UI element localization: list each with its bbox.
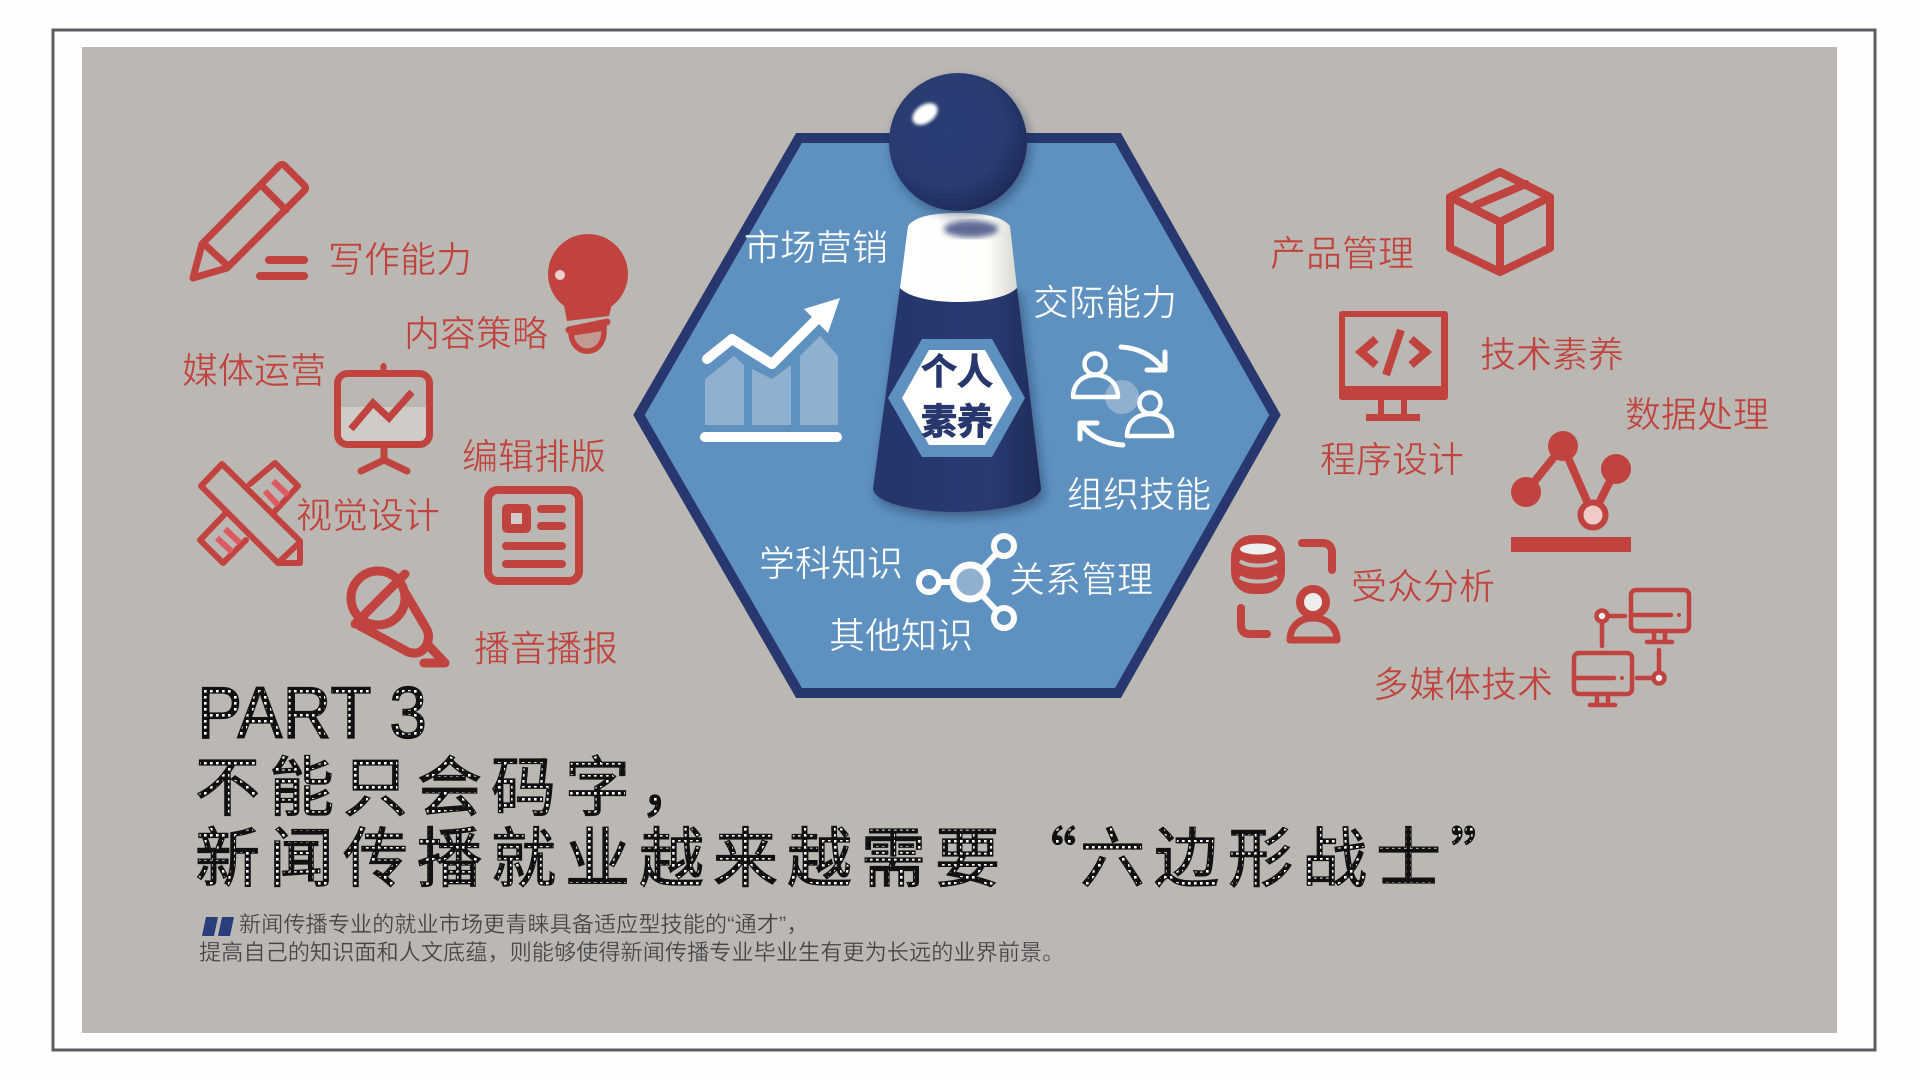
icon: people exchange <box>1073 347 1172 445</box>
icon: data processing <box>1511 431 1631 552</box>
label: 内容策略: 内容策略 <box>404 313 548 354</box>
central hexagon <box>639 138 1275 693</box>
label: 市场营销: 市场营销 <box>744 227 888 268</box>
title line 2: 新闻传播就业越来越需要“六边形战士” <box>195 806 1515 900</box>
label: 程序设计: 程序设计 <box>1320 439 1464 480</box>
label: 受众分析: 受众分析 <box>1351 566 1495 607</box>
badge text: 个人 <box>921 343 993 395</box>
pawn white collar <box>900 213 1017 302</box>
icon: code monitor <box>1339 311 1448 421</box>
title: PART 3: PART 3 <box>197 673 427 754</box>
body text line 1: 新闻传播专业的就业市场更青睐具备适应型技能的“通才”， <box>239 912 808 937</box>
pawn figure <box>873 73 1041 512</box>
label: 学科知识: 学科知识 <box>759 543 903 584</box>
body text line 2: 提高自己的知识面和人文底蕴，则能够使得新闻传播专业毕业生有更为长远的业界前景。 <box>199 940 1064 965</box>
label: 多媒体技术: 多媒体技术 <box>1373 664 1553 705</box>
icon: light bulb <box>548 234 628 351</box>
icon: market chart <box>705 298 840 437</box>
badge text <box>921 343 993 445</box>
label: 产品管理: 产品管理 <box>1270 233 1414 274</box>
ball shadow on collar <box>944 220 998 238</box>
icon: connected computers <box>1574 590 1689 705</box>
badge hexagon <box>888 339 1025 457</box>
label: 写作能力: 写作能力 <box>328 239 472 280</box>
label: 播音播报: 播音播报 <box>474 628 618 669</box>
label: 媒体运营: 媒体运营 <box>182 350 326 391</box>
label: 技术素养: 技术素养 <box>1480 334 1624 375</box>
label: 交际能力: 交际能力 <box>1033 282 1177 323</box>
icon: presentation board <box>338 366 430 471</box>
title line 1: 不能只会码字， <box>195 735 704 829</box>
badge inner hexagon <box>902 350 1012 445</box>
label: 关系管理: 关系管理 <box>1009 559 1153 600</box>
icon: ruler and pencil cross <box>200 463 300 563</box>
icon: network nodes <box>919 536 1014 628</box>
icon: pencil <box>193 164 306 278</box>
badge text: 素养 <box>921 393 993 445</box>
label: 组织技能: 组织技能 <box>1067 474 1211 515</box>
icon: microphone <box>351 571 445 663</box>
quote mark <box>202 917 234 936</box>
icon: product box <box>1450 172 1550 272</box>
pawn head ball <box>889 73 1027 211</box>
label: 视觉设计: 视觉设计 <box>296 495 440 536</box>
label: 数据处理: 数据处理 <box>1625 394 1769 435</box>
icon: newspaper <box>488 490 579 581</box>
pawn body <box>873 288 1041 512</box>
icon: audience database <box>1231 535 1337 640</box>
ball highlight <box>908 99 942 129</box>
label: 其他知识: 其他知识 <box>829 615 973 656</box>
label: 编辑排版: 编辑排版 <box>462 436 606 477</box>
